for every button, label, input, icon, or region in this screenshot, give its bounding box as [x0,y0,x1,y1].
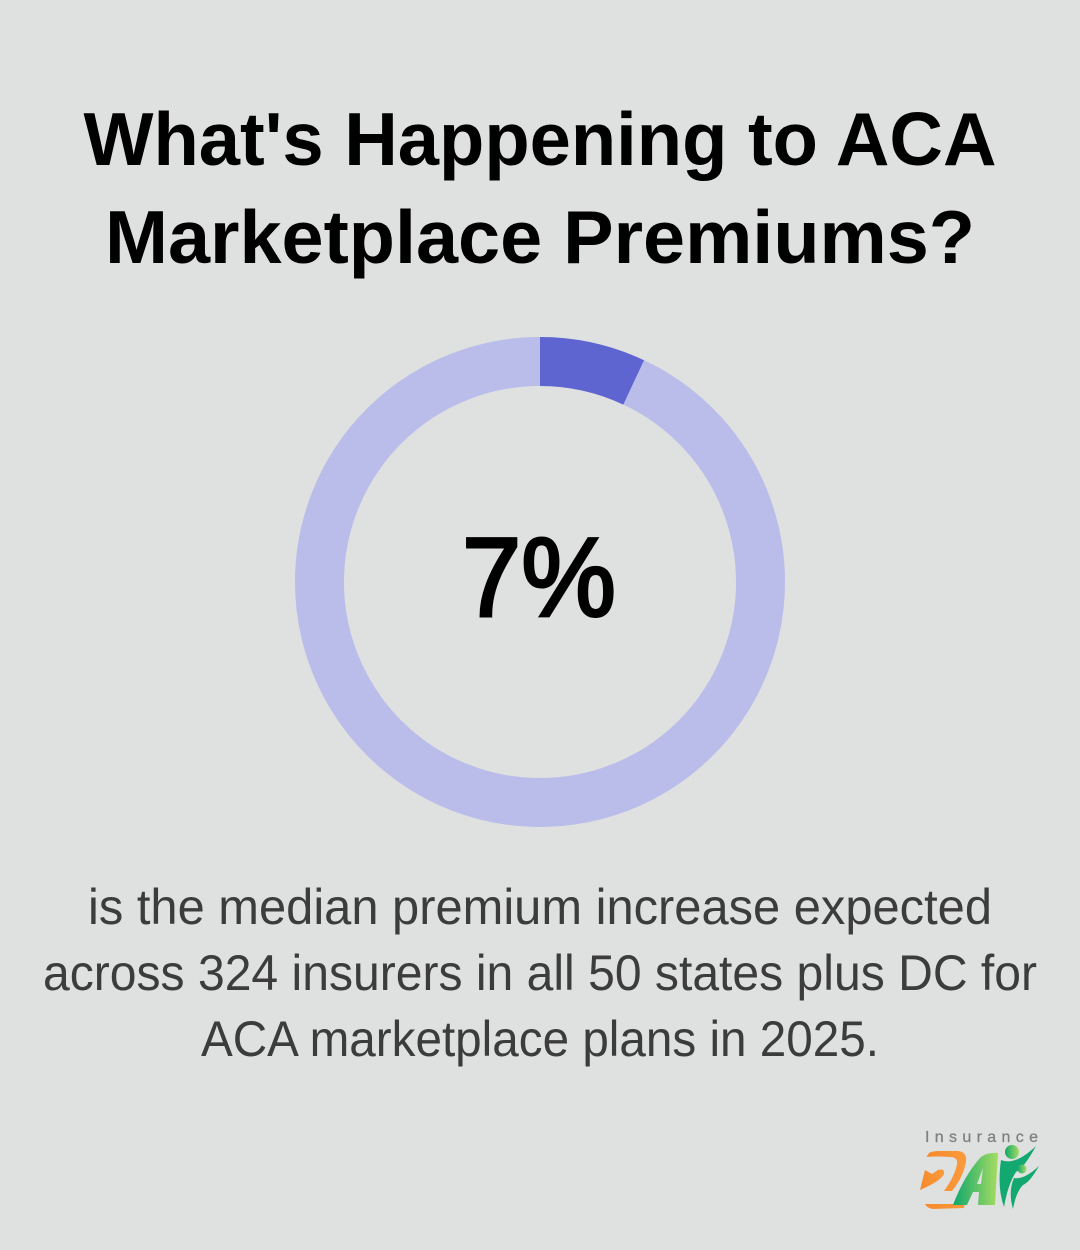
title [84,97,996,279]
logo figure: large person [1000,1145,1036,1207]
title: What's Happening to ACA [84,97,996,181]
logo numeral 2 [926,1151,966,1191]
description text: is the median premium increase expected [88,879,992,935]
logo letter A [953,1153,998,1205]
logo figure: small person [1011,1164,1039,1209]
title: Marketplace Premiums? [105,195,975,279]
description text: across 324 insurers in all 50 states plus DC for [43,945,1037,1001]
logo wordmark: Insurance [925,1129,1038,1146]
donut track [320,362,760,802]
description text [43,879,1037,1067]
donut highlighted segment [540,337,644,405]
donut value: 7% [462,515,616,640]
logo: Insurance2All [920,1129,1039,1209]
donut chart: 7% [320,337,760,802]
description text: ACA marketplace plans in 2025. [201,1011,879,1067]
